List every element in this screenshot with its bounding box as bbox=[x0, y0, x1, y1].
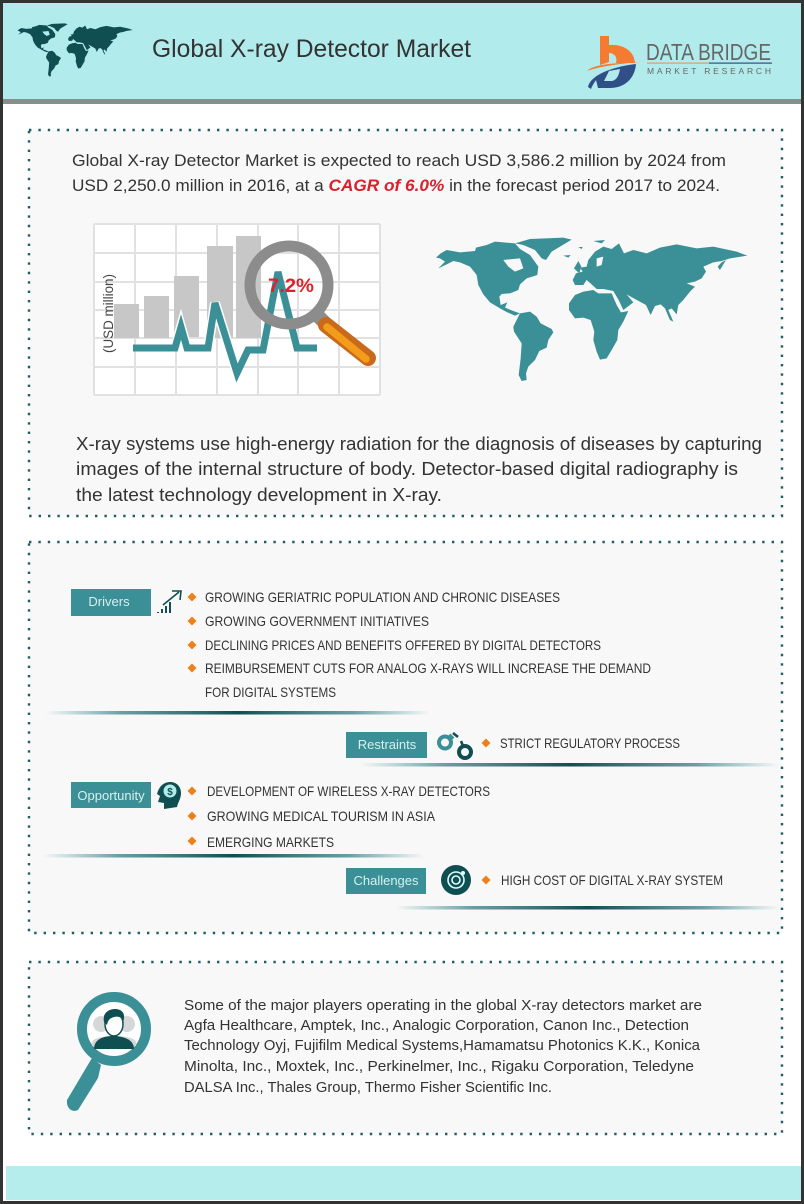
panel: major players bbox=[29, 962, 782, 1134]
text block: major players: Agfa Healthcare, Amptek, Inc., Analogic Corporation, Canon Inc., Detection bbox=[184, 1018, 689, 1034]
section: drivers: GROWING GOVERNMENT INITIATIVES bbox=[205, 613, 429, 629]
icon: magnifier with person bbox=[67, 997, 146, 1111]
section: opportunity: DEVELOPMENT OF WIRELESS X-RAY DETECTORS bbox=[207, 783, 490, 799]
title: Global X-ray Detector Market bbox=[152, 35, 471, 63]
section: opportunity bbox=[42, 782, 490, 858]
panel: market dynamics bbox=[29, 542, 782, 933]
bars bbox=[114, 236, 261, 338]
icon: rising arrow bbox=[158, 591, 181, 613]
panel: market overview bbox=[29, 130, 782, 516]
icon: head with dollar: $ bbox=[167, 787, 173, 798]
section: opportunity: GROWING MEDICAL TOURISM IN ASIA bbox=[207, 808, 436, 824]
logo: Data Bridge: DATA BRIDGE bbox=[646, 39, 771, 65]
pulse line bbox=[133, 272, 317, 373]
section: drivers bbox=[45, 589, 651, 714]
section: challenges: Challenges bbox=[353, 873, 419, 888]
text block: major players: DALSA Inc., Thales Group, Thermo Fisher Scientific Inc. bbox=[184, 1080, 552, 1096]
axis label: (USD million) bbox=[101, 274, 116, 353]
text block: X-ray description: the latest technology development in X-ray. bbox=[76, 484, 442, 505]
section: restraints bbox=[346, 732, 780, 766]
text block: X-ray description: images of the internal structure of body. Detector-based digital radiography is bbox=[76, 458, 738, 479]
header band bbox=[3, 3, 801, 104]
world map bbox=[436, 238, 747, 381]
text block: market summary: Global X-ray Detector Market is expected to reach USD 3,586.2 million by 2024 from bbox=[72, 152, 726, 170]
section: drivers: DECLINING PRICES AND BENEFITS OFFERED BY DIGITAL DETECTORS bbox=[205, 637, 601, 653]
text block: market summary: USD 2,250.0 million in 2016, at a CAGR of 6.0% in the forecast period 2017 to 2024. bbox=[72, 177, 720, 195]
icon: handcuffs bbox=[439, 733, 471, 758]
text block: major players bbox=[184, 998, 702, 1096]
section: drivers: Drivers bbox=[88, 594, 130, 609]
section: drivers: FOR DIGITAL SYSTEMS bbox=[205, 684, 336, 700]
footer band bbox=[6, 1166, 801, 1200]
text block: X-ray description: X-ray systems use high-energy radiation for the diagnosis of diseases by capturing bbox=[76, 433, 762, 454]
section: challenges bbox=[346, 865, 780, 910]
text block: market summary bbox=[72, 152, 726, 195]
section: drivers: GROWING GERIATRIC POPULATION AND CHRONIC DISEASES bbox=[205, 589, 560, 605]
section: drivers: REIMBURSEMENT CUTS FOR ANALOG X-RAYS WILL INCREASE THE DEMAND bbox=[205, 660, 651, 676]
text block: major players: Technology Oyj, Fujifilm Medical Systems,Hamamatsu Photonics K.K., Konica bbox=[184, 1038, 701, 1054]
section: challenges: HIGH COST OF DIGITAL X-RAY SYSTEM bbox=[501, 872, 723, 888]
chart: bars, pulse line and magnifier bbox=[94, 224, 380, 395]
section: opportunity: Opportunity bbox=[77, 788, 145, 803]
magnifier bbox=[250, 246, 368, 359]
logo: Data Bridge: MARKET RESEARCH bbox=[647, 66, 771, 76]
icon: head with dollar bbox=[157, 782, 181, 809]
logo: Data Bridge bbox=[587, 36, 772, 89]
section: opportunity: EMERGING MARKETS bbox=[207, 834, 334, 850]
icon: target bbox=[441, 865, 471, 895]
text block: major players: Minolta, Inc., Moxtek, Inc., Perkinelmer, Inc., Rigaku Corporation, Teledyne bbox=[184, 1059, 694, 1075]
section: restraints: Restraints bbox=[358, 737, 417, 752]
text block: X-ray description bbox=[76, 433, 762, 505]
text block: major players: Some of the major players operating in the global X-ray detectors market are bbox=[184, 998, 702, 1014]
icon: header world map bbox=[17, 23, 133, 76]
section: restraints: STRICT REGULATORY PROCESS bbox=[500, 735, 680, 751]
callout: 7.2%: 7.2% bbox=[268, 276, 314, 297]
